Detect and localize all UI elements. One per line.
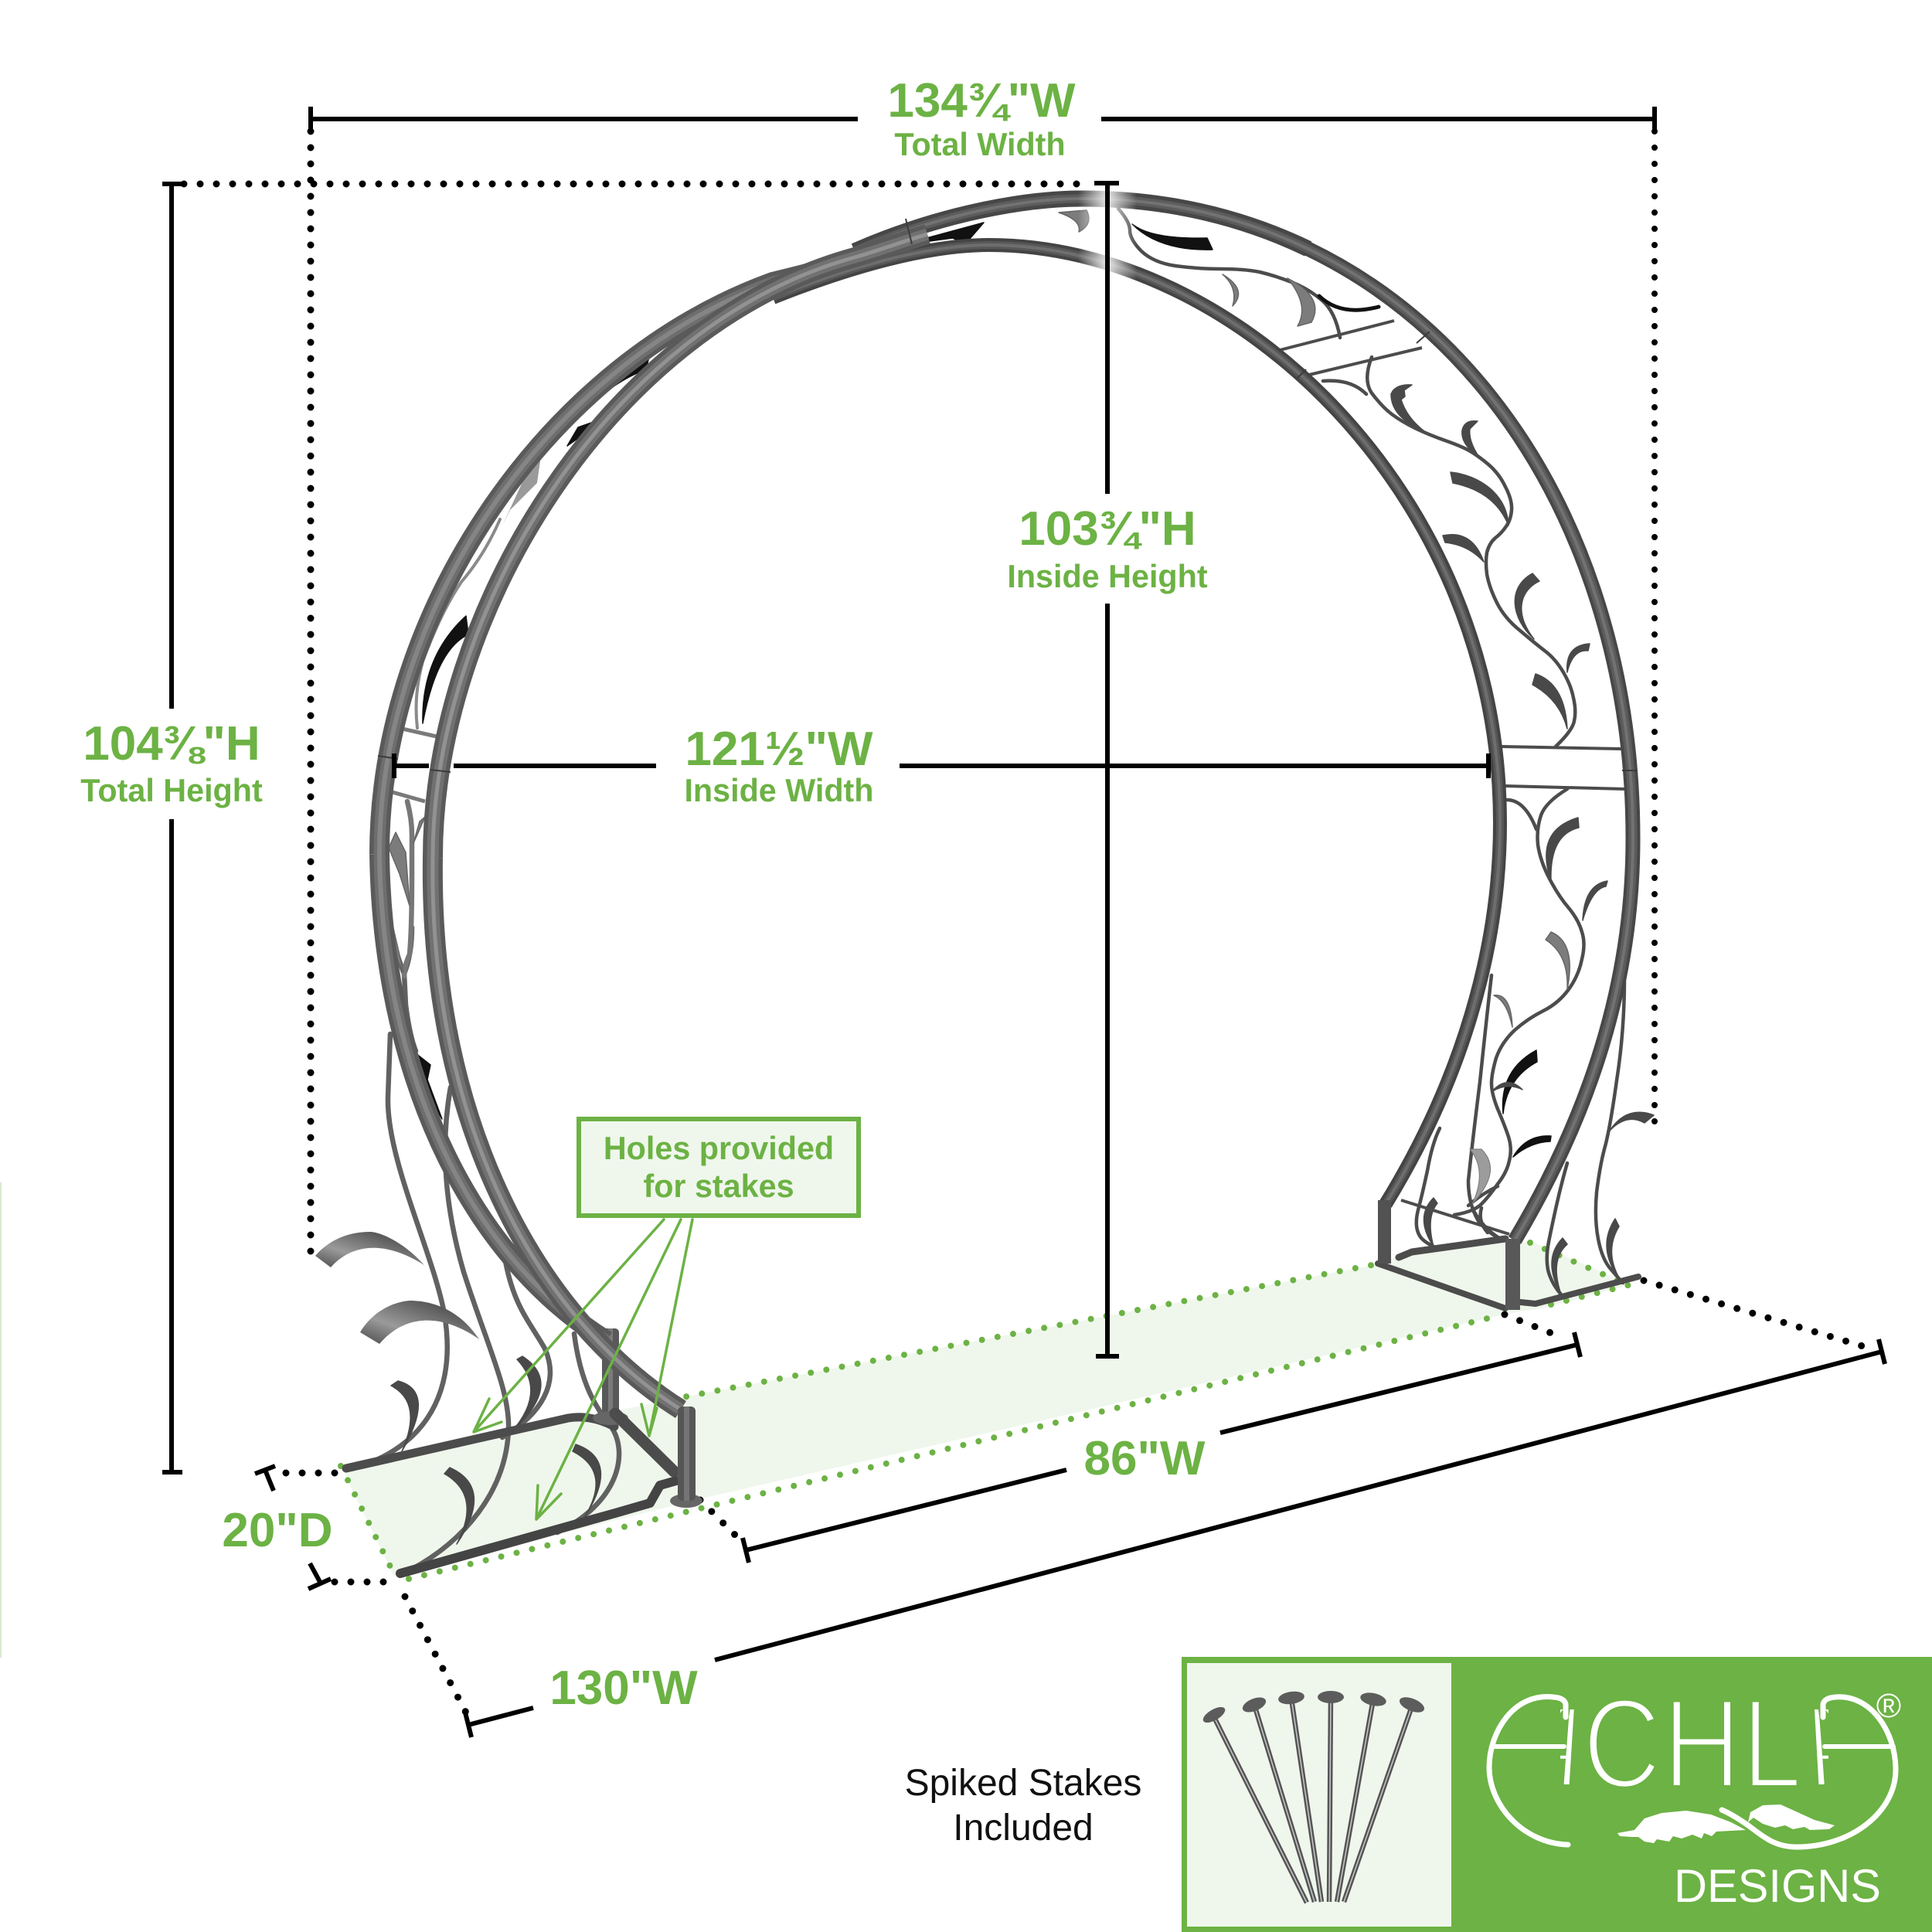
callout: holes provided for stakes: Holes provided [604,1131,834,1166]
dimension: inside height: 103¾"H [1019,502,1196,556]
logo: Achla Designs [1487,1694,1901,1903]
icon: six spiked stakes [1201,1690,1427,1903]
dimension: inside width: Inside Width [684,773,874,808]
callout arrows [474,1219,692,1519]
dimension: total height: 104⅜"H [83,717,260,770]
dimension: inside height: Inside Height [1007,559,1208,594]
right panel rungs [1280,321,1625,1234]
rear base frame [346,1328,676,1573]
caption: spiked stakes included: Included [953,1808,1094,1849]
arch seams [378,219,1637,772]
highlight fade at arch crown [1078,185,1137,282]
rear tube [379,270,819,1341]
caption: spiked stakes included [905,1763,1141,1849]
dimension: total height [80,184,263,1472]
right base frame [1378,1200,1638,1310]
brand panel [1182,1657,1932,1932]
designs wordmark: DESIGNS [1674,1860,1881,1912]
logo wordmark [1560,1700,1828,1787]
dimension: total width: 134¾"W [887,74,1076,128]
callout: holes provided for stakes [579,1119,859,1216]
dimension: total width [311,74,1655,162]
logo wordmark: CHL [1583,1672,1802,1815]
left panel ornamental vines [315,353,650,1570]
dimension: inside width [394,723,1488,808]
dimension: 20 inch depth: 20"D [222,1504,333,1557]
logo wordmark: A [1475,1672,1626,1815]
logo wordmark: A [1762,1672,1913,1815]
dimension: total width: Total Width [894,127,1066,162]
left edge sliver [0,1182,2,1658]
floor footprint shading [341,1239,1631,1579]
dimension: 86 inch width [743,1332,1580,1563]
logo swoosh ring [1489,1697,1896,1847]
caption: spiked stakes included: Spiked Stakes [905,1763,1141,1804]
dotted extension lines [184,131,1873,1713]
dimension: 130 inch width [465,1339,1885,1737]
outer top and right tube [855,199,1633,1240]
stakes inset panel [1187,1663,1451,1927]
logo wings [1617,1804,1835,1843]
dimension: 130 inch width: 130"W [549,1662,698,1715]
dimension: inside height [1007,183,1208,1356]
front left post [670,1406,702,1508]
arch illustration [315,185,1654,1573]
callout: holes provided for stakes: for stakes [643,1168,794,1204]
registered mark: ® [1876,1687,1901,1725]
inner right tube [773,245,1500,1204]
front left tube [433,234,927,1410]
dimension: 86 inch width: 86"W [1084,1432,1206,1485]
right panel ornamental vines [901,209,1654,1294]
dimension: inside width: 121½"W [685,723,873,776]
dimension: total height: Total Height [80,773,263,808]
dimension: 20 inch depth [222,1466,333,1589]
